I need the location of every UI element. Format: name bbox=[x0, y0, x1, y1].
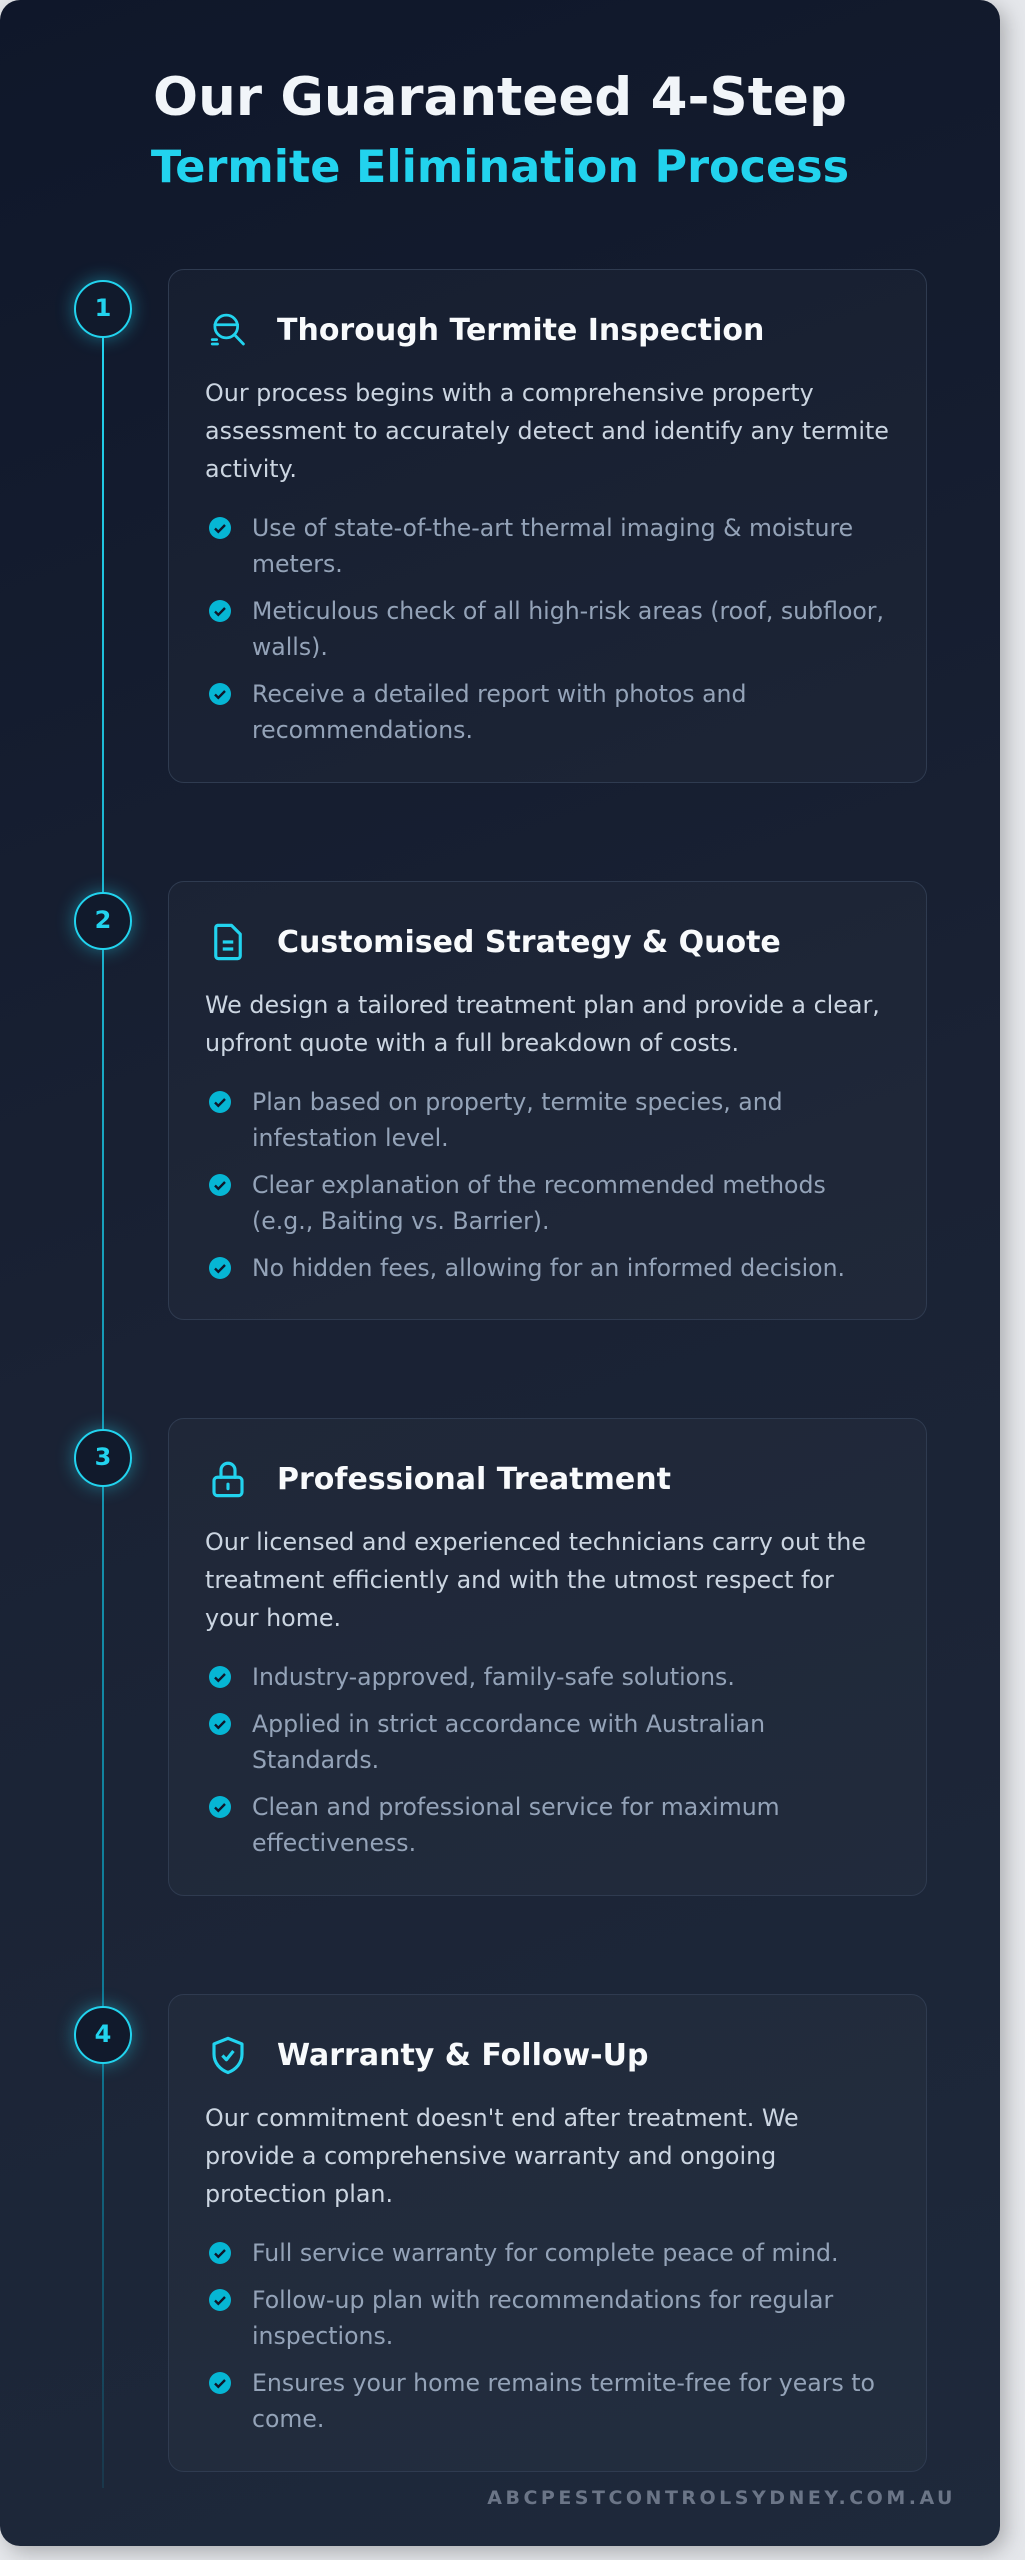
list: strategy points: No hidden fees, allowing for an informed decision. bbox=[252, 1254, 845, 1282]
heading: strategy: Customised Strategy & Quote bbox=[277, 924, 781, 960]
timeline line bbox=[102, 308, 104, 2488]
text: treatment intro: Our licensed and experienced technicians carry out the treatment efficiently and with the utmost respect for your home. bbox=[205, 1528, 866, 1632]
step number 3: 3 bbox=[95, 1443, 111, 1471]
list: strategy points bbox=[209, 1088, 845, 1282]
step number 2: 2 bbox=[95, 906, 111, 934]
panel: step 3 treatment bbox=[168, 1418, 927, 1896]
list: inspection points: Use of state-of-the-art thermal imaging & moisture meters. bbox=[252, 514, 853, 578]
list: treatment points: Applied in strict accordance with Australian Standards. bbox=[252, 1710, 765, 1774]
list: strategy points: Clear explanation of the recommended methods (e.g., Baiting vs. Barrier). bbox=[252, 1171, 826, 1235]
step number 4 bbox=[74, 2006, 132, 2064]
list: strategy points: Plan based on property, termite species, and infestation level. bbox=[252, 1088, 783, 1152]
footer url: ABCPESTCONTROLSYDNEY.COM.AU bbox=[487, 2487, 956, 2509]
panel: step 1 inspection bbox=[168, 269, 927, 783]
list: warranty points: Ensures your home remains termite-free for years to come. bbox=[252, 2369, 875, 2433]
step number 4: 4 bbox=[95, 2020, 111, 2048]
list: warranty points: Follow-up plan with recommendations for regular inspections. bbox=[252, 2286, 833, 2350]
step number 1: 1 bbox=[95, 294, 111, 322]
subtitle: Termite Elimination Process bbox=[151, 142, 849, 193]
heading: warranty: Warranty & Follow-Up bbox=[277, 2038, 648, 2072]
list: warranty points: Full service warranty for complete peace of mind. bbox=[252, 2239, 839, 2267]
list: inspection points: Receive a detailed report with photos and recommendations. bbox=[252, 680, 746, 744]
list: inspection points: Meticulous check of all high-risk areas (roof, subfloor, walls). bbox=[252, 597, 884, 661]
panel: step 4 warranty bbox=[168, 1994, 927, 2472]
text: inspection intro: Our process begins with a comprehensive property assessment to accurately detect and identify any termite activity. bbox=[205, 379, 889, 483]
step number 3 bbox=[74, 1429, 132, 1487]
list: warranty points bbox=[209, 2239, 875, 2433]
panel: step 2 strategy bbox=[168, 881, 927, 1320]
list: treatment points: Industry-approved, family-safe solutions. bbox=[252, 1663, 735, 1691]
heading: inspection: Thorough Termite Inspection bbox=[277, 312, 764, 348]
text: warranty intro: Our commitment doesn't end after treatment. We provide a comprehensive warranty and ongoing protection plan. bbox=[205, 2104, 799, 2208]
list: inspection points bbox=[209, 514, 884, 744]
heading: treatment: Professional Treatment bbox=[277, 1462, 671, 1496]
list: treatment points bbox=[209, 1663, 780, 1857]
list: treatment points: Clean and professional service for maximum effectiveness. bbox=[252, 1793, 780, 1857]
step number 1 bbox=[74, 280, 132, 338]
text: strategy intro: We design a tailored treatment plan and provide a clear, upfront quote with a full breakdown of costs. bbox=[205, 991, 880, 1057]
step number 2 bbox=[74, 892, 132, 950]
title: Our Guaranteed 4-Step bbox=[153, 67, 847, 128]
